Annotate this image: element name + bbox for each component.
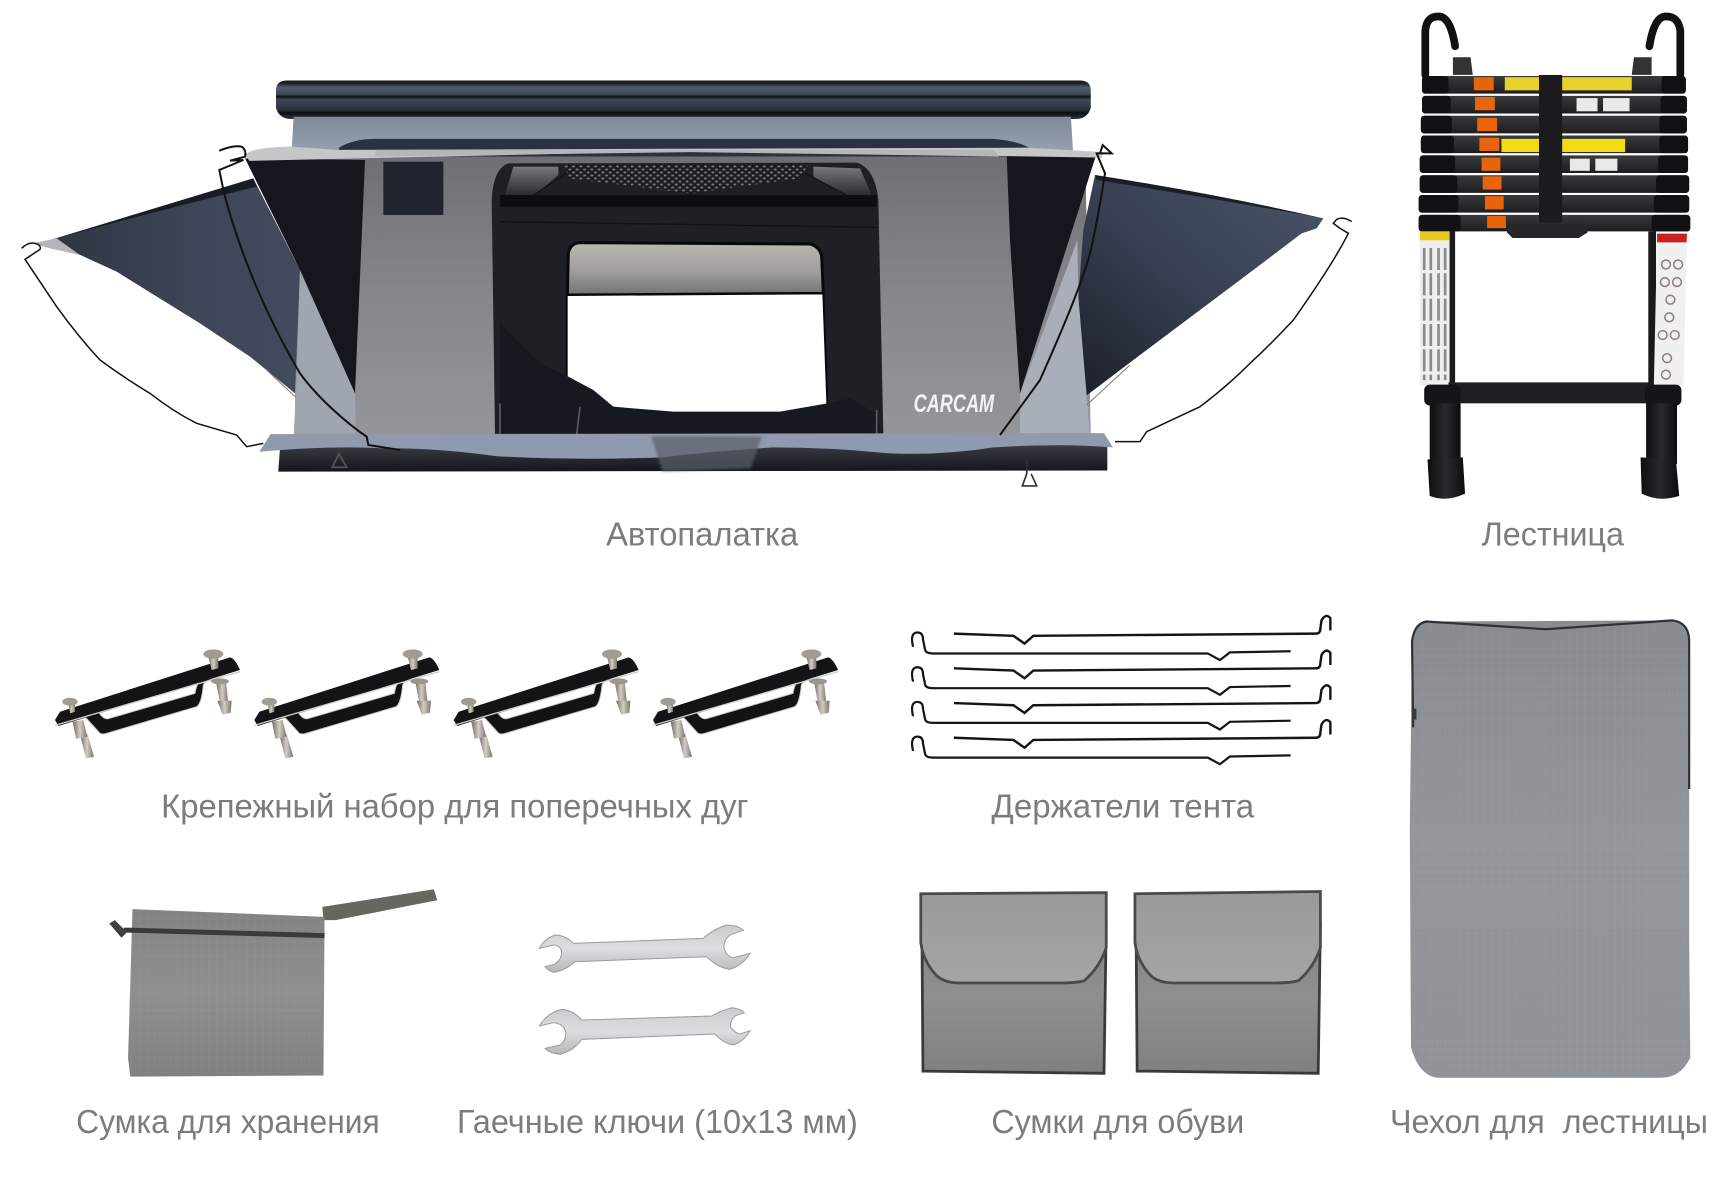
blur smudge at front — [651, 436, 762, 472]
black strip — [500, 195, 877, 207]
window pocket — [383, 162, 443, 215]
cover body — [1410, 620, 1690, 1078]
folded door fabric — [500, 323, 882, 435]
door back — [492, 163, 883, 435]
ceiling left — [505, 167, 558, 195]
net cords — [533, 173, 847, 200]
pouch body — [128, 909, 325, 1077]
door opening — [492, 163, 883, 436]
grey upper band — [291, 117, 1073, 152]
label: ladder cover: Чехол для лестницы — [1390, 1104, 1708, 1141]
panel: ladder — [1419, 16, 1690, 499]
label: storage bag: Сумка для хранения — [76, 1104, 380, 1141]
right safety sticker — [1654, 234, 1687, 386]
carry handle — [1507, 224, 1588, 238]
panel: storage bag — [109, 889, 437, 1077]
cross bar — [1448, 382, 1652, 403]
label: ladder: Лестница — [1482, 516, 1625, 553]
panel: shoe bag left — [921, 893, 1106, 1073]
lower fabric skirt — [259, 433, 1113, 459]
top light trim — [245, 147, 1104, 161]
pocket — [1136, 923, 1320, 1073]
black flap — [1007, 153, 1097, 393]
instruction stickers — [1570, 98, 1630, 171]
storage net — [563, 165, 808, 193]
label: mounting kit: Крепежный набор для поперечных дуг — [161, 789, 749, 826]
wing top hem — [57, 178, 257, 238]
dark inner strip — [339, 139, 1029, 156]
zipper seam — [1412, 620, 1689, 789]
tent body — [295, 156, 1091, 436]
flap — [1135, 891, 1320, 983]
left tent wing — [50, 178, 300, 393]
strip seam — [500, 222, 878, 227]
rung end caps — [1419, 76, 1690, 231]
logo: CARCAM — [914, 390, 995, 418]
rungs — [1419, 76, 1690, 231]
strap — [322, 889, 437, 920]
right wires — [1000, 145, 1352, 442]
left side of tent — [32, 158, 443, 440]
right side of tent — [1007, 153, 1323, 435]
base frame — [278, 443, 1107, 472]
hooks — [1425, 16, 1680, 75]
label: shoe bags: Сумки для обуви — [991, 1104, 1244, 1141]
ceiling right — [813, 167, 872, 195]
left safety sticker — [1420, 231, 1450, 386]
panel: roof tent — [22, 80, 1352, 486]
label: wrenches: Гаечные ключи (10х13 мм) — [457, 1104, 858, 1141]
door zip ends — [500, 403, 877, 436]
wing top hem — [1095, 175, 1323, 218]
velcro strap — [1539, 75, 1562, 223]
zipper pull — [1412, 709, 1416, 720]
rails — [1448, 231, 1455, 386]
flap — [921, 893, 1106, 983]
wrench lower — [539, 1008, 750, 1054]
black flap — [245, 158, 365, 393]
white window opening — [567, 293, 827, 413]
wing tip — [32, 238, 80, 255]
warning labels — [1505, 77, 1632, 90]
icon group: crossbar mounting brackets — [55, 649, 838, 758]
left wires — [22, 146, 400, 450]
label: awning holders: Держатели тента — [991, 789, 1255, 826]
zipper — [124, 930, 325, 936]
right leg — [1641, 385, 1681, 499]
wrench upper — [539, 925, 750, 972]
icon group: awning wire holders — [912, 616, 1330, 764]
lower side panel — [1020, 240, 1090, 435]
pocket — [922, 923, 1106, 1073]
top clips — [1453, 57, 1473, 75]
right tent wing — [1078, 175, 1323, 397]
left leg — [1424, 385, 1465, 499]
icon group: wrenches — [539, 925, 750, 1054]
panel: shoe bag right — [1135, 891, 1320, 1073]
roof shell — [276, 80, 1091, 119]
strap loops — [332, 454, 347, 467]
panel: ladder cover — [1410, 620, 1690, 1078]
lower side panel — [293, 270, 356, 440]
grey window top — [567, 243, 823, 295]
label: tent: Автопалатка — [606, 516, 799, 553]
orange tags — [1474, 77, 1506, 228]
